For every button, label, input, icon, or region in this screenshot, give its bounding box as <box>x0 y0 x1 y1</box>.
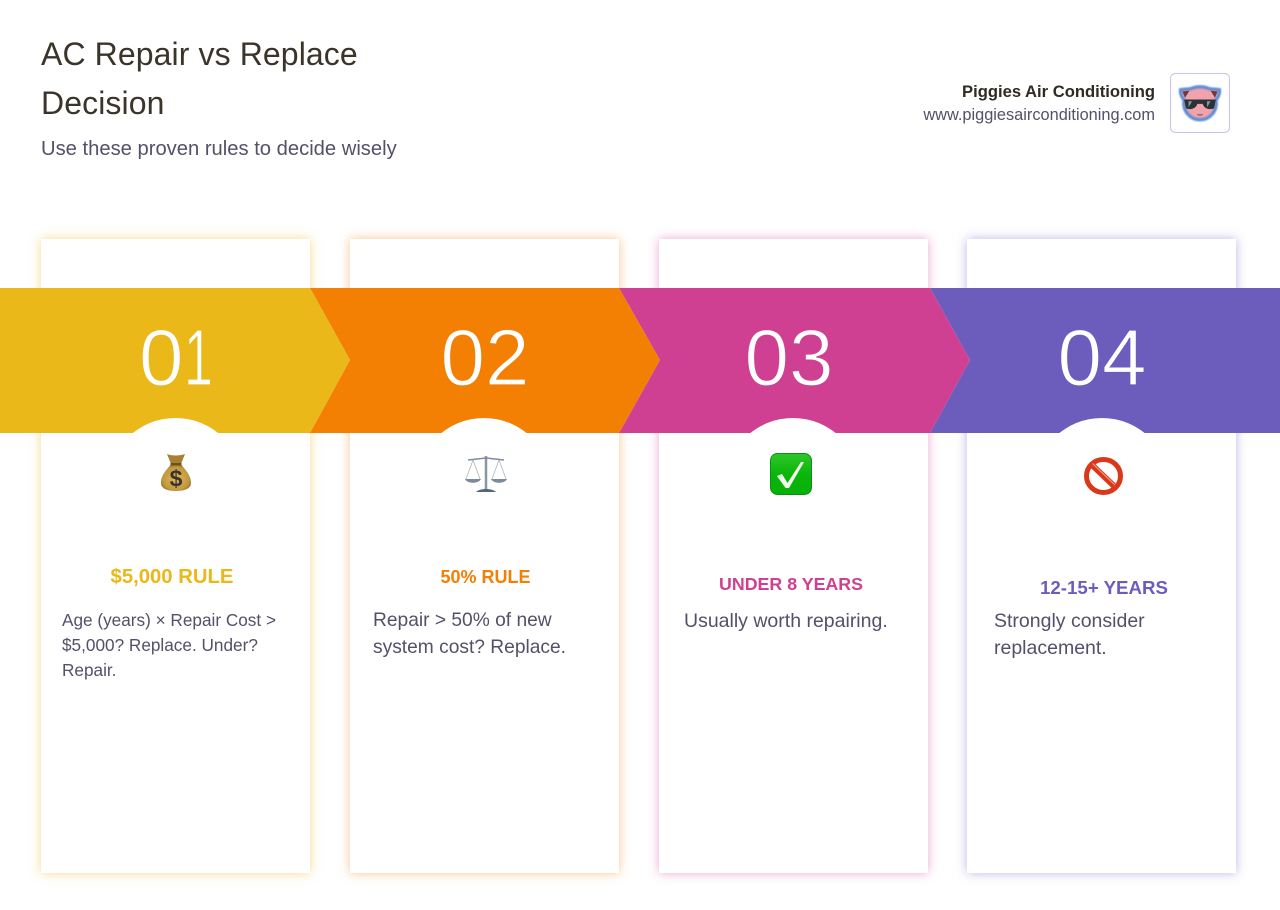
body text card 1: Repair. <box>62 660 116 680</box>
body text card 3: Usually worth repairing. <box>684 610 888 632</box>
number 02: 02 <box>441 313 529 402</box>
chevron 01 <box>0 288 350 433</box>
number 01: 1 <box>184 313 212 402</box>
header: title <box>41 36 358 120</box>
body text card 1 <box>62 610 276 680</box>
header: title: Decision <box>41 84 165 120</box>
heading: under 8 years: UNDER 8 YEARS <box>719 574 863 594</box>
icon: balance scale <box>465 456 507 492</box>
body text card 1: $5,000? Replace. Under? <box>62 635 258 655</box>
icon: check mark <box>770 453 812 495</box>
card 3 <box>659 239 928 873</box>
heading: 12-15+ years: 12-15+ YEARS <box>1040 576 1168 598</box>
number 04: 04 <box>1058 313 1146 402</box>
card 1 <box>41 239 310 873</box>
body text card 4: Strongly consider <box>994 610 1145 632</box>
subtitle: Use these proven rules to decide wisely <box>41 138 397 160</box>
brand name: Piggies Air Conditioning <box>962 82 1155 101</box>
icon: money bag: $ <box>170 466 183 492</box>
body text card 4: replacement. <box>994 636 1107 658</box>
heading: $5,000 rule: $5,000 RULE <box>111 566 233 588</box>
heading: 50% rule: 50% RULE <box>440 567 531 587</box>
number 03: 03 <box>745 313 833 402</box>
brand url: www.piggiesairconditioning.com <box>923 106 1155 124</box>
chevron band <box>0 288 1280 433</box>
icon: pig logo <box>1170 73 1230 133</box>
body text card 2 <box>373 610 566 658</box>
card 2 <box>350 239 619 873</box>
icon: money bag <box>161 454 191 492</box>
chevron 02 <box>310 288 660 433</box>
body text card 2: Repair > 50% of new <box>373 610 552 631</box>
body text card 4 <box>994 610 1145 658</box>
number 01 <box>139 313 212 402</box>
body text card 2: system cost? Replace. <box>373 636 566 658</box>
icon: prohibited sign <box>1084 457 1123 495</box>
chevron 03 <box>619 288 970 433</box>
header: title: AC Repair vs Replace <box>41 36 358 72</box>
number 01: 0 <box>139 313 184 402</box>
white circle notches <box>133 418 1144 433</box>
chevron 04 <box>930 288 1280 433</box>
body text card 1: Age (years) × Repair Cost > <box>62 610 276 630</box>
card 4 <box>967 239 1236 873</box>
